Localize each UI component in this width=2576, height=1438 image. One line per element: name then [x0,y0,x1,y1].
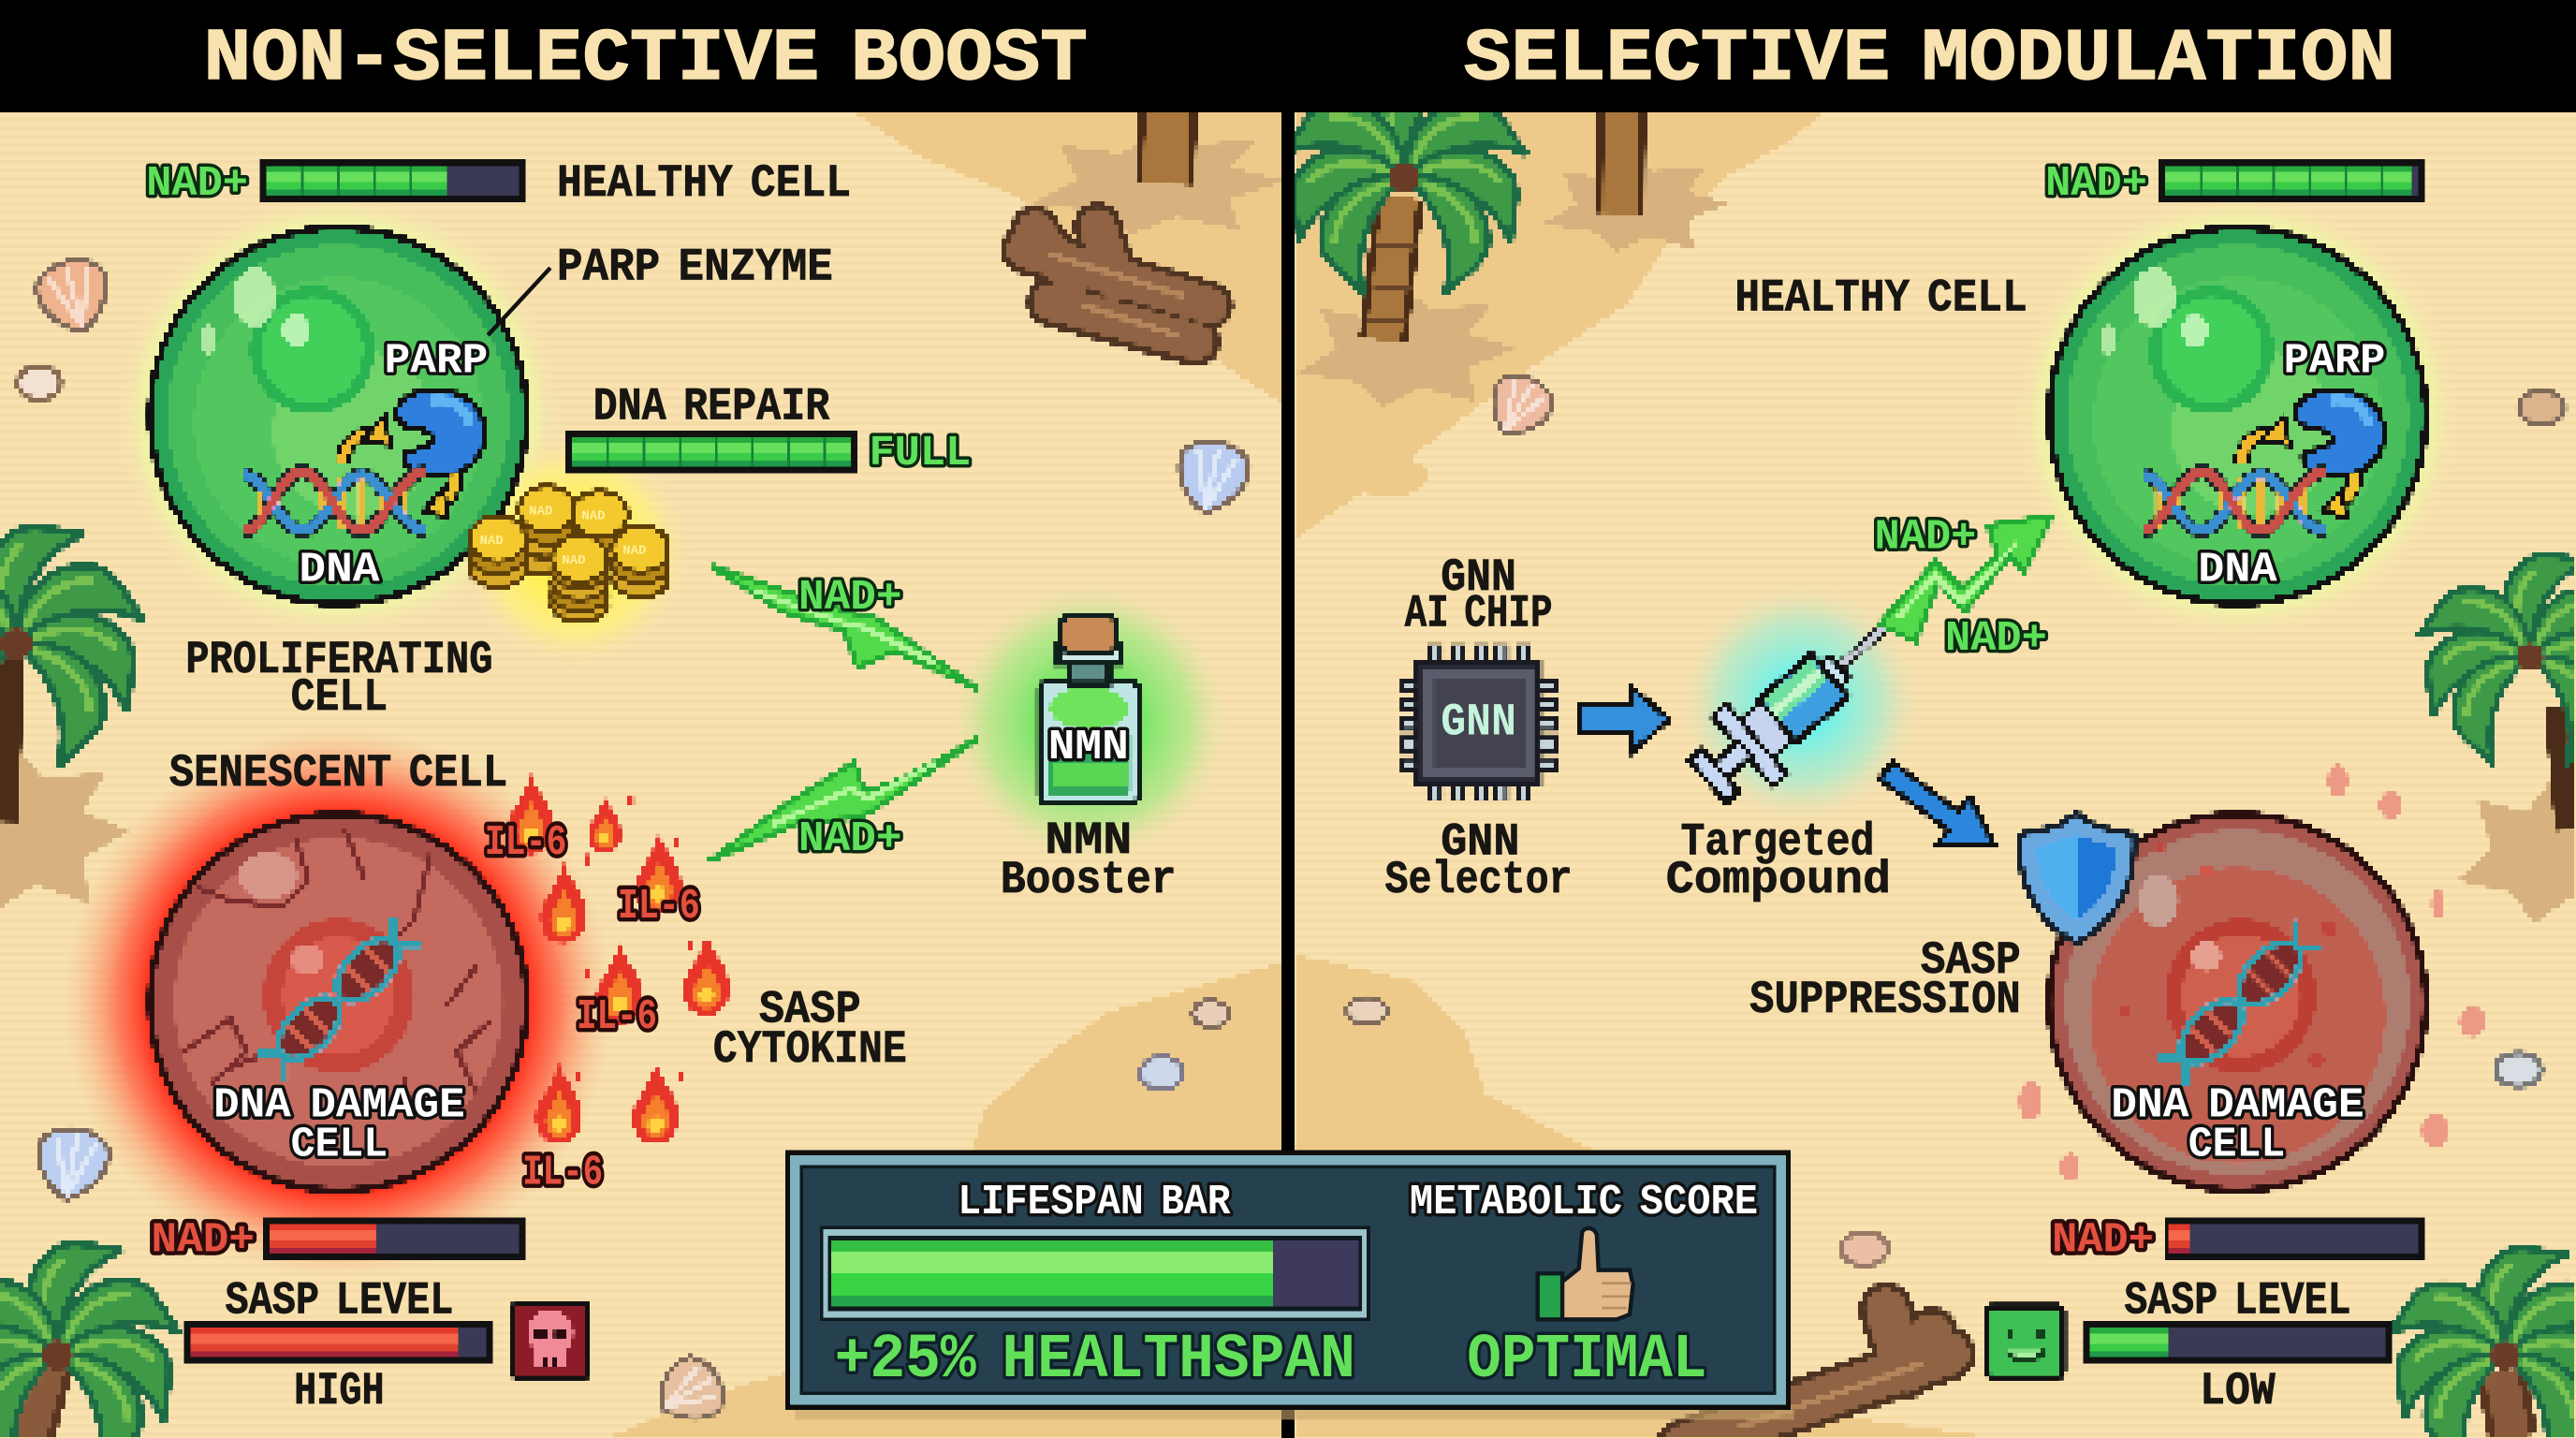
SASP bar: low [2083,1321,2392,1364]
healthy cell [2049,227,2425,604]
right bars [2083,159,2425,1364]
NMN bottle [1040,616,1138,803]
right labels: Selector [1385,854,1573,906]
labels text: NAD+ [146,159,248,208]
panel labels: OPTIMAL [1467,1325,1707,1396]
green bolt arrow to cell [1880,516,2052,640]
palm shadows [0,126,2576,923]
labels text: NAD+ [798,573,902,622]
right labels: NAD+ [2045,159,2147,208]
damaged cell suppressed [2049,814,2425,1191]
skull icon [513,1305,588,1377]
labels text [146,157,1177,1417]
panel shadow [795,1410,1794,1419]
labels text: NAD [479,534,504,549]
right labels: SUPPRESSION [1749,974,2021,1026]
right labels: Compound [1666,854,1891,906]
labels text: NAD [529,504,552,519]
labels text: NMN [1045,814,1132,867]
GNN chip [1401,644,1558,801]
right labels: GNN [1441,816,1519,869]
right labels: PARP [2284,337,2385,386]
right labels [1385,159,2385,1417]
labels text: PROLIFERATING [185,634,493,686]
right labels: AI CHIP [1405,588,1553,640]
central divider [1281,112,1295,1438]
labels text: DNA [299,545,380,594]
darker sand patches [607,111,1996,1438]
driftwood left [1025,227,1209,342]
panel labels [835,1178,1758,1396]
labels text: HEALTHY CELL [557,157,851,210]
panel: lifespan and metabolic score [785,1151,1794,1419]
labels text: NAD+ [798,814,902,863]
right labels: HEALTHY CELL [1734,272,2027,325]
right labels: SASP [1921,934,2021,987]
faded SASP particles [2019,764,2485,1180]
right labels: DNA [2198,545,2277,594]
labels text: DNA REPAIR [593,381,830,433]
panel labels: +25% HEALTHSPAN [835,1325,1355,1396]
glows right [1676,192,2461,829]
panel labels: LIFESPAN BAR [958,1178,1231,1226]
labels text: NAD [622,543,646,558]
DNA repair bar: full [565,431,857,473]
lifespan bar [820,1225,1370,1321]
labels text: PARP [385,337,488,386]
NAD+ bar: senescent low [263,1218,526,1260]
left labels [146,157,1177,1417]
labels text: CYTOKINE [713,1023,907,1076]
panel labels: METABOLIC SCORE [1410,1178,1758,1226]
panel: selective modulation [1385,17,2485,1417]
blue arrow to shield [1880,762,1995,846]
title: non-selective boost: NON-SELECTIVE BOOST [204,17,1088,101]
labels text: CELL [291,1121,388,1169]
right labels: DNA DAMAGE [2111,1081,2364,1130]
left artwork [151,227,1138,1377]
NAD+ bar: full healthy [2159,159,2425,202]
labels text: DNA DAMAGE [213,1081,465,1130]
left bars [184,159,857,1364]
right labels: NAD+ [1945,614,2047,663]
lightning bolt bottom [710,738,979,861]
panel frame [785,1151,1791,1410]
leader line PARP enzyme [488,268,550,335]
SASP bar: high [184,1321,493,1364]
thumbs up icon [1538,1228,1633,1319]
right labels: NAD+ [2052,1216,2154,1265]
labels text: SASP [759,984,861,1036]
labels text: IL-6 [522,1149,603,1197]
NAD+ bar: senescent depleted [2165,1218,2425,1260]
right labels: CELL [2188,1121,2285,1169]
title: selective modulation: SELECTIVE MODULATION [1464,17,2395,101]
labels text: NAD [562,553,586,568]
labels text: IL-6 [618,882,700,931]
right labels: NAD+ [1875,512,1976,561]
labels text: FULL [869,429,971,477]
NAD+ bar: healthy partial [259,159,526,202]
arrow: chip to syringe [1579,688,1669,751]
labels text: PARP ENZYME [557,241,833,293]
healthy proliferating cell [151,227,527,604]
right labels: GNN [1441,551,1516,604]
labels text: SASP LEVEL [225,1274,453,1327]
labels text: NAD+ [151,1216,255,1265]
labels text: IL-6 [485,818,567,867]
right labels: LOW [2200,1365,2276,1417]
labels text: IL-6 [577,992,657,1041]
smiley icon [1986,1306,2063,1377]
SASP cytokine flames [507,774,729,1144]
labels text: NMN [1048,723,1129,771]
driftwood right [1682,1310,1949,1438]
labels text: SENESCENT CELL [169,747,507,800]
panel: non-selective boost [63,17,1234,1417]
right labels: Targeted [1680,816,1875,869]
syringe [1677,589,1919,816]
lightning bolt top [710,565,979,690]
NAD+ coin stacks [470,487,668,621]
glows left [63,192,1234,1278]
senescent cell [151,814,527,1191]
right artwork [1401,227,2485,1377]
labels text: HIGH [294,1365,385,1417]
right labels: SASP LEVEL [2124,1274,2351,1327]
right labels: GNN [1441,697,1516,749]
shield [2019,814,2134,943]
labels text: NAD [581,509,606,524]
labels text: CELL [291,671,388,724]
labels text: Booster [1001,854,1177,906]
